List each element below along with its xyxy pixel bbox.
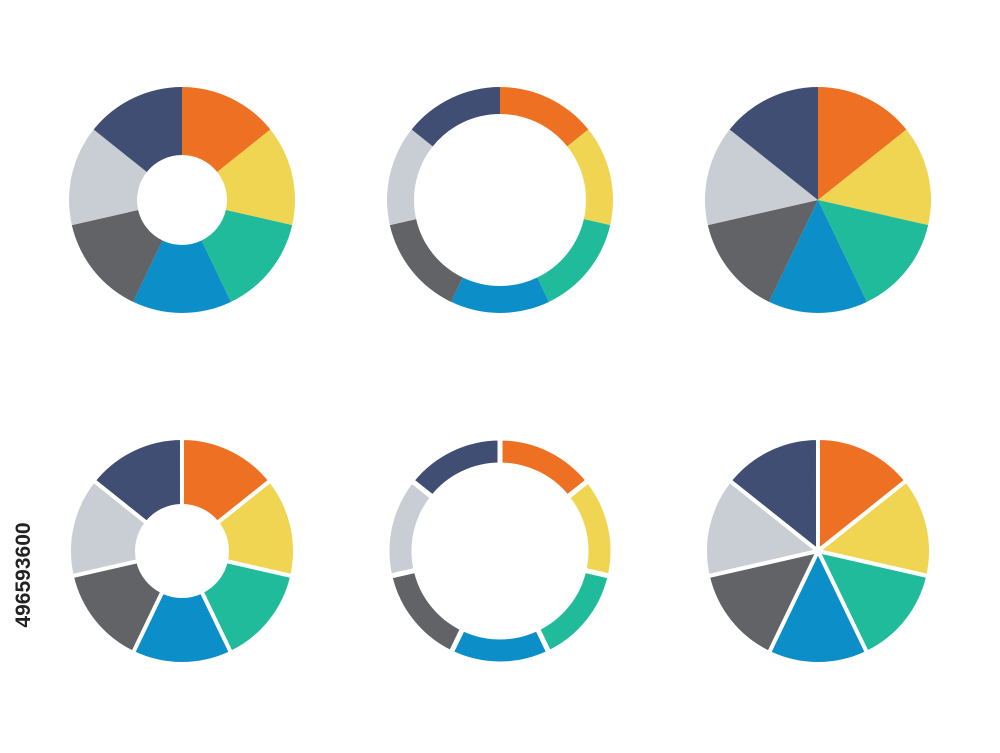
chart: pie with gaps [688,411,961,691]
chart: pie [688,60,961,340]
chart: donut thick with gaps [52,411,325,691]
chart: donut thick [52,60,325,340]
chart: thin ring with gaps [370,411,643,691]
watermark id text: 496593600 [12,522,35,628]
chart: thin ring [370,60,643,340]
